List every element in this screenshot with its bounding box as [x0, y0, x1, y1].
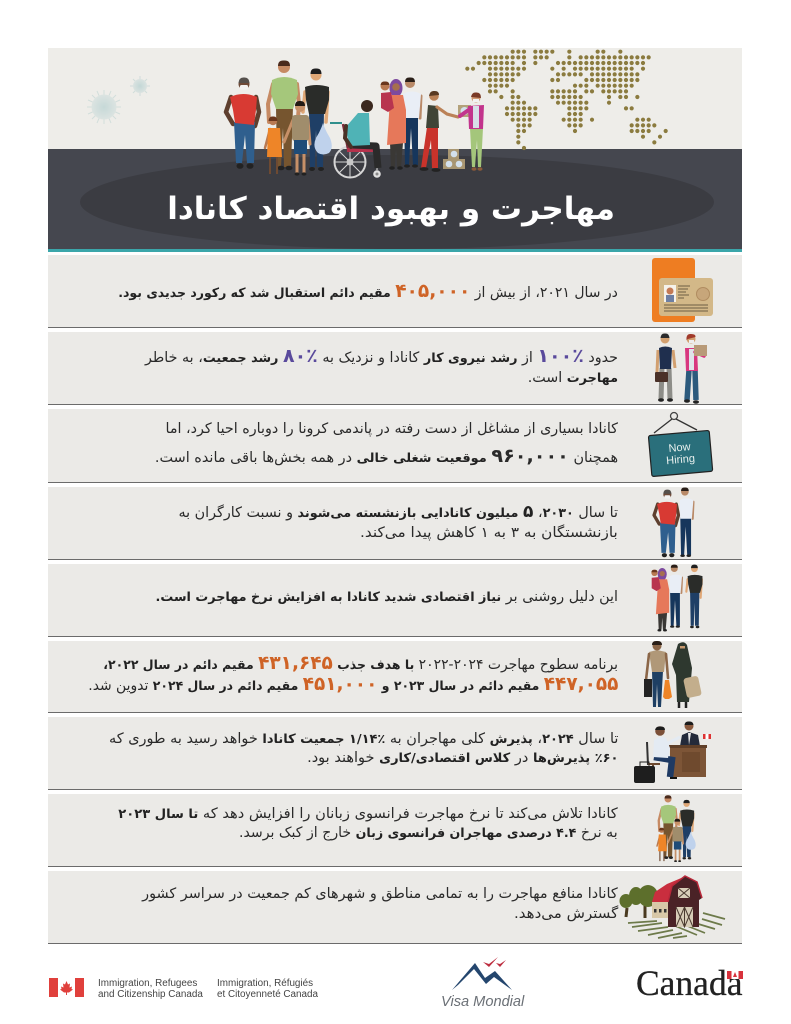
icon: Canadian flag — [49, 978, 84, 997]
panel: row 1 permanent residents record — [48, 255, 742, 328]
icon: travellers with luggage — [644, 641, 702, 708]
man with red trousers — [420, 91, 458, 172]
text: vacancies line 1: کانادا بسیاری از مشاغل از دست رفته در پاندمی کرونا را دوباره احیا کرد، اما — [165, 421, 618, 437]
text: French department name — [217, 978, 318, 1000]
carried box — [458, 105, 471, 117]
text: retirements line 1: تا سال ۲۰۳۰، ۵ میلیون کانادایی بازنشسته می‌شوند و نسبت کارگران به — [178, 502, 618, 522]
icon: now hiring sign: Hiring — [666, 453, 695, 467]
text: English department name: and Citizenship Canada — [98, 988, 203, 1000]
text: Visa Mondial wordmark: Visa Mondial — [441, 994, 524, 1010]
text: francophone line 1: کانادا تلاش می‌کند تا نرخ مهاجرت فرانسوی زبانان را افزایش دهد که تا سال ۲۰۲۳ — [119, 806, 618, 822]
text: workforce line 1: حدود ٪۱۰۰ از رشد نیروی کار کانادا و نزدیک به ٪۸۰ رشد جمعیت، به خاطر — [145, 345, 618, 367]
text: admissions line 2: ٪۶۰ پذیرش‌ها در کلاس اقتصادی/کاری خواهند بود. — [307, 750, 618, 766]
icon: large virus — [87, 90, 121, 124]
text: admissions line 1: تا سال ۲۰۲۴، پذیرش کلی مهاجران به ٪۱/۱۴ جمعیت کانادا خواهد رسید به طوری که — [109, 731, 618, 747]
text: levels plan line 1: برنامه سطوح مهاجرت ۲۰۲۴-۲۰۲۲ با هدف جذب ۴۳۱,۶۴۵ مقیم دائم در سال ۲۰۲۲، — [103, 652, 618, 674]
text: English department name — [98, 978, 203, 1000]
icon: small virus — [130, 76, 150, 96]
text: French department name: Immigration, Réfugiés — [217, 978, 313, 989]
panel: row 6 immigration levels plan — [48, 641, 742, 713]
teal rule — [48, 249, 742, 252]
panel: row 3 job vacancies — [48, 409, 742, 483]
text: regions line 2: گسترش می‌دهد. — [514, 906, 618, 922]
panel: row 7 admissions target — [48, 717, 742, 790]
text: record admissions: در سال ۲۰۲۱، از بیش از ۴۰۵,۰۰۰ مقیم دائم استقبال شد که رکورد جدیدی بود. — [118, 280, 618, 302]
panel: row 2 workforce growth — [48, 332, 742, 405]
icon: immigration desk — [634, 722, 711, 783]
logo: Visa Mondial — [441, 957, 524, 1010]
icon: two workers — [652, 488, 694, 558]
logo: Canada wordmark: Canada — [636, 963, 742, 1003]
panel: row 9 regional benefits — [48, 871, 742, 944]
dark ellipse — [80, 155, 714, 249]
text: French department name: et Citoyenneté Canada — [217, 988, 318, 1000]
illustration: header ellipse, map, viruses and people — [80, 50, 714, 249]
icon: family with children — [656, 795, 696, 862]
text: regions line 1: کانادا منافع مهاجرت را به تمامی مناطق و شهرهای کم جمعیت در سراسر کشور — [142, 886, 618, 902]
text: English department name: Immigration, Refugees — [98, 978, 197, 989]
panel: row 4 retirements — [48, 487, 742, 560]
people group — [226, 60, 484, 178]
text: workforce line 2: مهاجرت است. — [528, 370, 618, 386]
text: vacancies line 2: همچنان ۹۶۰,۰۰۰ موقعیت شغلی خالی در همه بخش‌ها باقی مانده است. — [155, 445, 618, 467]
icon: now hiring sign — [648, 412, 714, 477]
icon: resident card — [652, 258, 713, 322]
panel: row 5 economic need — [48, 564, 742, 637]
dark title band — [48, 149, 742, 249]
icon: barn and trees — [620, 875, 726, 939]
text: retirements line 2: بازنشستگان به ۳ به ۱ کاهش پیدا می‌کند. — [360, 525, 618, 541]
wheelchair user — [330, 100, 381, 178]
panel: row 8 francophone immigration — [48, 794, 742, 867]
stacked boxes — [443, 149, 465, 169]
icon: dotted world map — [467, 52, 666, 148]
text: economic need: این دلیل روشنی بر نیاز اقتصادی شدید کانادا به افزایش نرخ مهاجرت است. — [156, 589, 618, 605]
icon: wordmark flag — [727, 971, 743, 979]
icon: worker and courier — [655, 334, 707, 404]
text: francophone line 2: به نرخ ۴.۴ درصدی مهاجران فرانسوی زبان خارج از کبک برسد. — [239, 825, 618, 841]
text: levels plan line 2: ۴۴۷,۰۵۵ مقیم دائم در سال ۲۰۲۳ و ۴۵۱,۰۰۰ مقیم دائم در سال ۲۰۲۴ تدوین شد. — [88, 673, 618, 695]
panel: header banner — [48, 48, 742, 252]
footer: government of Canada signature — [49, 978, 318, 1000]
icon: family of three — [651, 564, 703, 632]
sign label: Now — [668, 441, 691, 455]
title: مهاجرت و بهبود اقتصاد کانادا — [167, 191, 615, 227]
